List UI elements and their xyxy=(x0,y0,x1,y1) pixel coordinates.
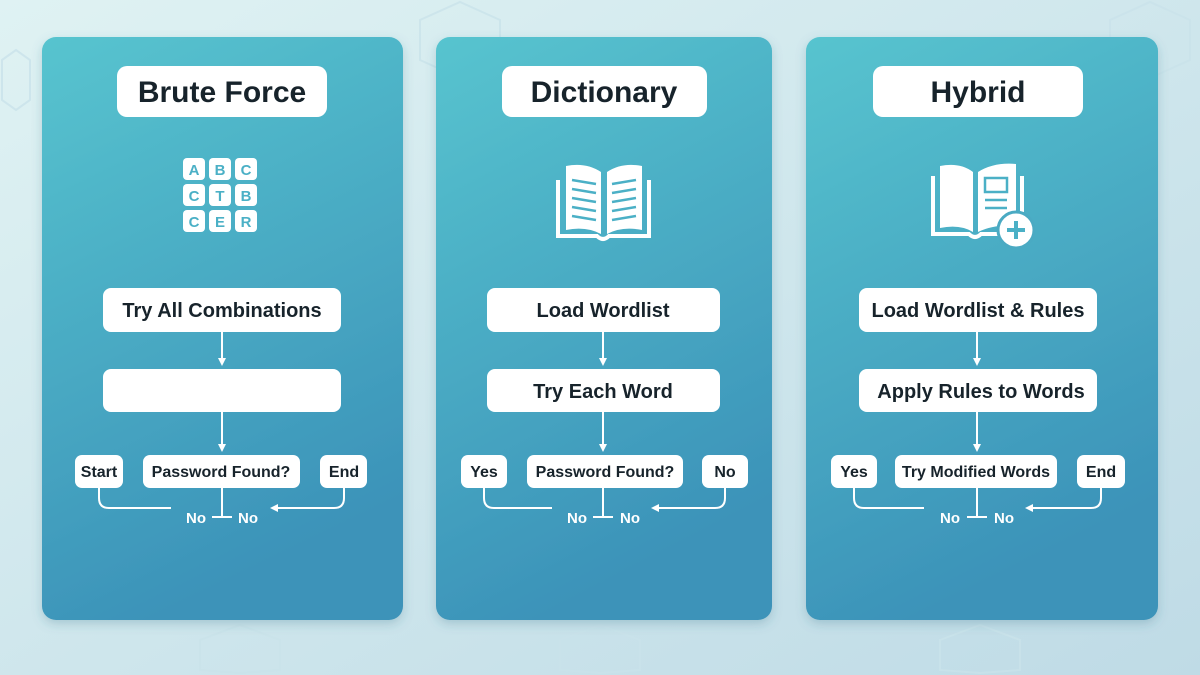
icon: open book xyxy=(558,165,649,239)
step: apply rules: Apply Rules to Words xyxy=(877,381,1085,403)
arrow xyxy=(976,412,978,450)
panel: hybrid: No xyxy=(940,510,960,527)
decision row: Try Modified Words xyxy=(902,464,1050,481)
heading: Hybrid xyxy=(873,66,1083,117)
decision row: Yes xyxy=(470,464,498,481)
step: try each word xyxy=(487,369,720,412)
icon: letter grid xyxy=(183,158,257,232)
heading: Hybrid: Hybrid xyxy=(930,76,1026,109)
decision row: End xyxy=(329,464,359,481)
icon: letter grid: E xyxy=(215,214,225,231)
icon: letter grid: C xyxy=(189,188,200,205)
step: try each word: Try Each Word xyxy=(533,381,673,403)
icon: letter grid: B xyxy=(215,162,226,179)
panel: hybrid xyxy=(806,37,1158,620)
arrow xyxy=(976,332,978,364)
heading: Brute Force xyxy=(117,66,327,117)
decision row: Password Found? xyxy=(536,464,674,481)
arrow xyxy=(602,412,604,450)
decision row xyxy=(75,455,367,488)
step: load wordlist xyxy=(487,288,720,332)
step: apply rules xyxy=(859,369,1097,412)
icon: letter grid: C xyxy=(189,214,200,231)
icon: letter grid: T xyxy=(215,188,225,205)
icon: book with plus xyxy=(933,164,1034,248)
icon: letter grid: R xyxy=(241,214,252,231)
decision row xyxy=(831,455,1125,488)
step: load wordlist & rules xyxy=(859,288,1097,332)
heading: Dictionary xyxy=(502,66,707,117)
decision row: No xyxy=(714,464,736,481)
step: try all combinations xyxy=(103,288,341,332)
decision row xyxy=(461,455,748,488)
step: load wordlist: Load Wordlist xyxy=(537,300,670,322)
step: try all combinations: Try All Combinations xyxy=(122,300,322,322)
panel: dictionary xyxy=(436,37,772,620)
decision row: End xyxy=(1086,464,1116,481)
arrow xyxy=(221,412,223,450)
decision row: Password Found? xyxy=(152,464,290,481)
connectors xyxy=(854,488,1101,517)
decision row: Start xyxy=(81,464,118,481)
heading: Brute Force: Brute Force xyxy=(138,76,306,109)
icon: letter grid: C xyxy=(241,162,252,179)
decision row: Yes xyxy=(840,464,868,481)
arrow xyxy=(221,332,223,364)
icon: letter grid: B xyxy=(241,188,252,205)
panel: dictionary: No xyxy=(620,510,640,527)
panel: brute force: No xyxy=(238,510,258,527)
connectors xyxy=(99,488,344,517)
arrow xyxy=(602,332,604,364)
panel: brute force: No xyxy=(186,510,206,527)
panel: hybrid: No xyxy=(994,510,1014,527)
heading: Dictionary: Dictionary xyxy=(531,76,678,109)
panel: dictionary: No xyxy=(567,510,587,527)
step: empty box xyxy=(103,369,341,412)
icon: letter grid: A xyxy=(189,162,200,179)
panel: brute force xyxy=(42,37,403,620)
connectors xyxy=(484,488,725,517)
step: load wordlist & rules: Load Wordlist & Rules xyxy=(872,300,1084,322)
